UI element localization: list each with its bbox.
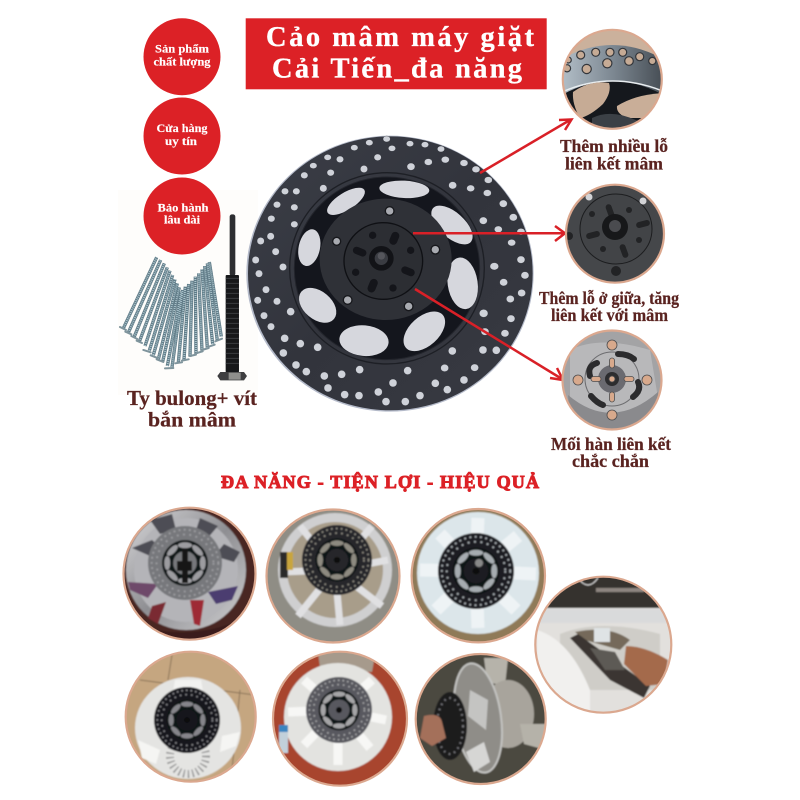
badge: quality product: chất lượng: [154, 54, 210, 68]
caption: welds: [551, 434, 671, 471]
photo 4: white plate on red floor: [272, 650, 408, 786]
title banner: Cải Tiến_đa năng: [272, 54, 522, 84]
hub: [344, 223, 423, 299]
badge: trusted shop: uy tín: [165, 134, 197, 148]
detail photo: centre holes: [565, 184, 665, 284]
outer holes: [252, 136, 529, 406]
screws fan: [120, 257, 222, 368]
photo 1: chrome washer plate: [122, 506, 257, 641]
detail photo: welds: [562, 330, 662, 432]
caption: bolt + screws: Ty bulong+ vít: [127, 386, 258, 410]
caption: welds: chắc chắn: [572, 451, 649, 471]
caption: more holes: liên kết mâm: [565, 154, 663, 174]
photo 2: chrome plate with black disc: [265, 508, 401, 644]
caption: more holes: Thêm nhiều lỗ: [560, 136, 668, 156]
screws backdrop: [118, 190, 258, 395]
photo 7: plate lifted from drum: [415, 653, 547, 785]
dark ring with windows: [290, 173, 484, 364]
photo 6: installing plate in washer: [535, 576, 673, 714]
arrow to middle detail: [413, 226, 565, 241]
caption: bolt + screws: [127, 386, 258, 432]
badge: quality product: [144, 18, 220, 95]
title banner: [246, 18, 547, 89]
detail photo: extra holes: [560, 28, 665, 132]
caption: centre holes: [539, 288, 679, 325]
photo 3: white plate on tile floor: [125, 650, 257, 782]
outer rim: [246, 136, 534, 412]
bolt: [217, 214, 247, 380]
caption: welds: Mối hàn liên kết: [551, 434, 671, 454]
badge: long warranty: lâu dài: [164, 212, 201, 226]
main disc: [246, 136, 534, 412]
badge: quality product: Sản phẩm: [155, 42, 209, 56]
caption: more holes: [560, 136, 668, 174]
badge: long warranty: [144, 178, 220, 254]
caption: centre holes: Thêm lỗ ở giữa, tăng: [539, 288, 679, 308]
arrow to bottom detail: [415, 289, 563, 380]
section heading: ĐA NĂNG - TIỆN LỢI - HIỆU QUẢ: [221, 471, 539, 492]
arrow to top detail: [480, 120, 572, 173]
badge: trusted shop: [144, 98, 220, 174]
caption: centre holes: liên kết với mâm: [551, 305, 668, 325]
screws and bolt: [120, 214, 247, 380]
title banner: Cảo mâm máy giặt: [266, 22, 534, 53]
caption: bolt + screws: bắn mâm: [148, 408, 236, 432]
badge: long warranty: Bảo hành: [158, 200, 209, 214]
plate holes: [333, 207, 440, 311]
centre plate: [320, 199, 452, 320]
photo 5: light blue plate: [410, 508, 546, 644]
badge: trusted shop: Cửa hàng: [156, 121, 208, 135]
